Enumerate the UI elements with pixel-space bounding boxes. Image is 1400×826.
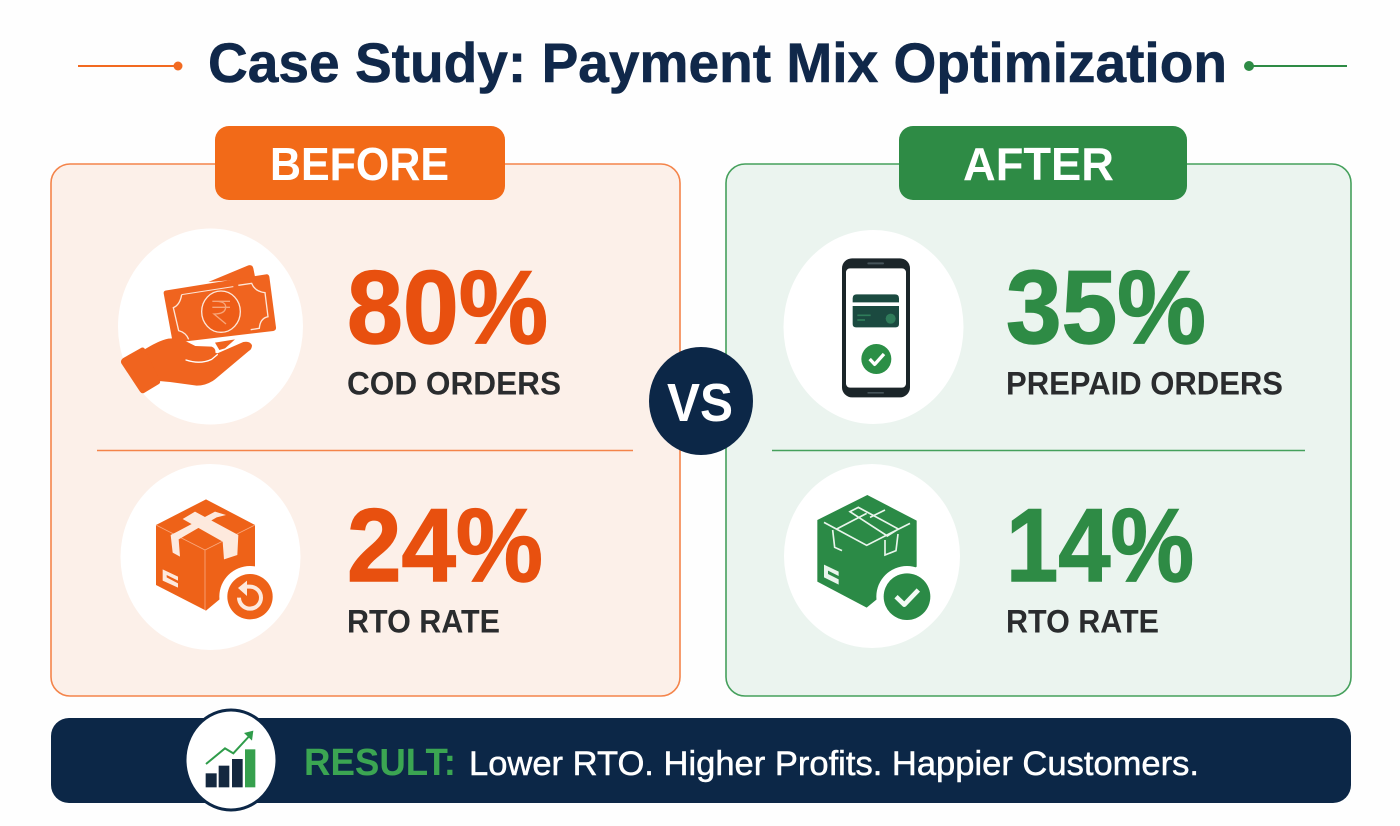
before badge (215, 126, 505, 200)
title accent: orange line (78, 62, 182, 70)
stat: 24%: 24% (347, 488, 543, 604)
title accent: green line (1244, 61, 1347, 71)
stat: 35%: 35% (1006, 250, 1206, 366)
stat: 80%: 80% (347, 250, 548, 366)
result bar (51, 710, 1351, 810)
VS badge (649, 347, 753, 455)
label: COD ORDERS: COD ORDERS (347, 366, 561, 402)
result text: Lower RTO. Higher Profits. Happier Customers. (469, 745, 1199, 783)
stat: 14%: 14% (1006, 488, 1194, 604)
icon: cash in hand (118, 228, 303, 424)
icon: delivered box (784, 464, 960, 648)
label: PREPAID ORDERS: PREPAID ORDERS (1006, 366, 1283, 402)
label: RTO RATE: RTO RATE (347, 604, 500, 640)
panel: after (726, 126, 1351, 696)
after panel background (726, 164, 1351, 696)
VS badge: VS (667, 373, 733, 433)
label: RTO RATE: RTO RATE (1006, 604, 1159, 640)
before panel background (51, 164, 680, 696)
after badge (899, 126, 1187, 200)
result label: RESULT: (304, 742, 456, 784)
title: Case Study: Payment Mix Optimization (208, 31, 1227, 94)
before badge: BEFORE (270, 138, 449, 190)
icon: return box (120, 464, 300, 650)
panel: before (51, 126, 680, 696)
icon: growth chart (185, 710, 277, 810)
after badge: AFTER (963, 138, 1114, 190)
icon: phone payment (784, 230, 964, 424)
